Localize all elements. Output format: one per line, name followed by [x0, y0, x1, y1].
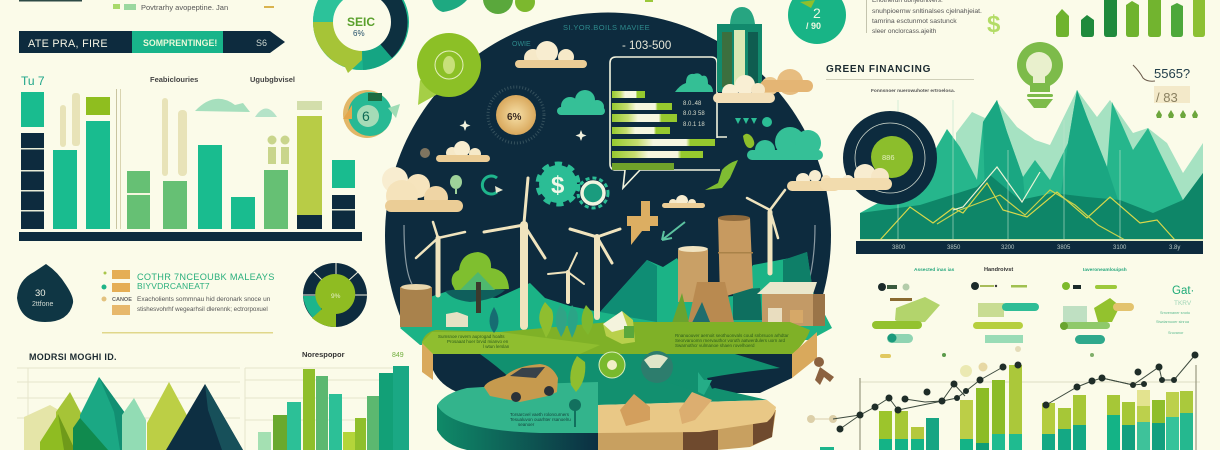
coin	[488, 87, 544, 143]
legend swatches and description: CANOE	[112, 297, 132, 303]
turtle medallion icon	[343, 90, 400, 138]
green heading: COTHR 7NCEOUBK MALEAYS	[137, 272, 275, 282]
lower-right column labels	[914, 267, 1127, 273]
green financing heading: Fonnsnoer nuerowuhoter ertroelosa.	[871, 88, 955, 94]
top donut badge: 6%	[353, 29, 365, 38]
lower-right column labels: Handroivst	[984, 267, 1013, 273]
globe	[641, 351, 673, 383]
top donut badge	[313, 0, 409, 73]
wind turbines	[416, 178, 785, 326]
bar chart speech box	[610, 57, 727, 188]
platform captions: l wtun lerslan	[483, 344, 510, 349]
lime badge	[417, 33, 481, 105]
trend lines	[833, 355, 1195, 429]
column headers: Feabiclouries	[150, 75, 198, 84]
lime top platform	[422, 322, 810, 354]
dark ring gauge: 886	[882, 153, 895, 162]
green financing heading: GREEN FINANCING	[826, 64, 931, 75]
bars	[21, 92, 44, 127]
drop badge	[17, 264, 73, 322]
green mountain line chart: 3.8y	[1169, 245, 1180, 251]
turtle medallion icon: 6	[362, 108, 370, 124]
banner value: S6	[256, 38, 267, 48]
top-right circle badge	[788, 0, 846, 44]
disc caption: seanoer	[518, 422, 535, 427]
top-right pill bars	[1056, 0, 1205, 37]
small arc label: OWIE	[512, 41, 531, 48]
green mountain line chart	[856, 90, 1203, 254]
drop badge: 30	[35, 288, 46, 299]
banner arrow	[19, 31, 285, 53]
banner segment label: SOMPRENTINGE!	[143, 38, 217, 48]
baseline	[19, 232, 362, 241]
lightbulb icon	[1017, 42, 1063, 108]
banner title: ATE PRA, FIRE	[28, 38, 108, 50]
leaf and arrow icons	[662, 134, 754, 240]
gear icons with dollar: $	[551, 172, 565, 199]
lower-right column labels: Iaveroneamlouipsh	[1083, 267, 1127, 273]
timeline group 1	[872, 283, 946, 358]
lower-left bar chart	[245, 366, 409, 450]
segmented donut	[303, 263, 368, 327]
right figures: / 83	[1156, 90, 1178, 105]
chart lines	[880, 167, 1175, 240]
leaf medal	[599, 352, 625, 378]
white cottage	[603, 311, 635, 344]
gear icons with dollar	[538, 164, 608, 208]
platform captions: Rnanuouver aernoit seothuonvals coud snbrsuon arhdtar	[675, 333, 789, 338]
top-right circle badge: 2	[813, 5, 821, 21]
top-right text block: tamrina esctunmot sastunck	[872, 18, 957, 25]
brown figure icon	[814, 357, 834, 385]
central number: - 103-500	[622, 40, 671, 52]
legend swatches and description	[102, 270, 275, 334]
drop badge: 2ttfone	[32, 301, 54, 308]
data points	[836, 352, 1198, 432]
right gat label: Sruvanor	[1168, 331, 1184, 335]
second tier disc	[437, 378, 776, 450]
chart tag: Tu 7	[21, 74, 45, 88]
central heading: SI.YOR.BOILS MAVIEE	[563, 23, 650, 32]
green mountain line chart: 3850	[947, 245, 961, 251]
top donut badge: SEIC	[347, 15, 375, 29]
upper-right clouds	[713, 69, 840, 191]
snail icon	[420, 148, 430, 158]
disc caption: Tesualuvon ouarhter rsanoelru	[510, 417, 571, 422]
legend swatches and description: stishesvohrhf wegearhsil dlerennk; ectrorpoxuel	[137, 306, 268, 313]
platform captions: Sumsnoe rovern auprogad hoalts	[438, 334, 505, 339]
right figures	[1133, 65, 1198, 118]
bar chart speech box: 8.0.1 18	[683, 122, 705, 128]
right gat label: Srnvenaner snotu	[1160, 311, 1190, 315]
car	[484, 364, 558, 402]
stacked bars	[879, 411, 892, 439]
green mountain line chart: 3100	[1113, 245, 1127, 251]
top-left text strip: Povtrarhy avopeptine. Jan	[141, 3, 228, 12]
cooling towers	[400, 215, 753, 327]
lower-left bars heading: Norespopor	[302, 350, 345, 359]
description lines: Exacholients sommnau hid deronark snoce un	[137, 296, 271, 303]
segmented donut: 9%	[331, 293, 341, 300]
ring arcs	[404, 225, 412, 284]
horizontal bars	[612, 91, 645, 98]
top icons above circle	[432, 0, 653, 14]
dark ring gauge	[843, 111, 937, 205]
tan plus icon	[627, 201, 658, 245]
right gat label: TKRV	[1174, 300, 1192, 307]
top-right circle badge: / 90	[806, 21, 821, 31]
green clouds	[557, 90, 823, 160]
barn and small houses	[446, 282, 825, 327]
right gat label: Stwdarnuoer sinrua	[1156, 320, 1190, 324]
tree	[452, 252, 509, 313]
dollar icon: $	[987, 11, 1001, 38]
green mountain line chart: 3200	[1001, 245, 1015, 251]
platform captions	[438, 333, 789, 349]
right gat label	[1156, 285, 1194, 335]
top-right text block: snuhpioernw snltinalses cjelnahjeiat.	[872, 8, 982, 15]
leaf row	[490, 302, 593, 338]
left bar chart: Ugubgbvisel	[250, 75, 295, 84]
top-right text block: sleer onclorcass.ajeith	[872, 28, 937, 35]
left bar chart	[19, 74, 362, 241]
central dark circle	[385, 13, 831, 330]
timeline group 2	[971, 282, 1039, 352]
lower-left heading: MODRSI MOGHI ID.	[29, 352, 117, 362]
lower-right bar chart	[833, 352, 1200, 450]
small cloud in chart	[675, 73, 713, 92]
right gat label: Gat·	[1172, 285, 1194, 297]
disc caption	[510, 412, 571, 427]
balloon icon	[450, 175, 462, 194]
right figures: 5565?	[1154, 66, 1190, 81]
leaf icon and small tree	[569, 356, 585, 427]
sparkles	[460, 120, 586, 141]
teal hills behind platform	[400, 252, 832, 345]
lower-left bars tag: 849	[392, 352, 404, 359]
platform captions: Swarnothcr vulmanoe shaen rovelhoerd	[675, 343, 755, 348]
lower-right column labels: Assected inas ias	[914, 267, 955, 273]
wooden roof icons	[620, 372, 712, 426]
top-right text block	[866, 0, 982, 35]
cream clouds	[382, 41, 705, 212]
mountain chart	[17, 368, 243, 450]
values: 8.0..48	[683, 101, 702, 107]
platform captions: Seorvaruomn rnervauthor voruth aatwerdulers uorn ard	[675, 338, 786, 343]
small status icons	[735, 117, 772, 127]
bottom-right-of-center teal chip	[820, 447, 834, 450]
decorative sticks and clouds	[60, 89, 290, 229]
cloud over ring	[820, 164, 892, 190]
building	[717, 7, 762, 92]
timeline group 3	[1060, 282, 1134, 357]
platform underside	[422, 332, 817, 395]
refresh icon	[482, 176, 503, 194]
disc caption: Torsarcvel vaeth roloncurners	[510, 412, 570, 417]
bar chart speech box: 8.0.3 58	[683, 111, 705, 117]
platform captions: Prosaaat hoer brvid mianvo en	[447, 339, 509, 344]
coin: 6%	[507, 112, 522, 123]
green mountain line chart: 3800	[892, 245, 906, 251]
green mountain line chart: 3805	[1057, 245, 1071, 251]
green financing heading	[826, 64, 974, 94]
connector dots	[807, 415, 837, 423]
vertical grid	[898, 100, 1120, 240]
top-left text strip	[19, 0, 274, 12]
legend swatches and description: BIYVDRCANEAT7	[137, 281, 210, 291]
axis band	[856, 241, 1203, 254]
